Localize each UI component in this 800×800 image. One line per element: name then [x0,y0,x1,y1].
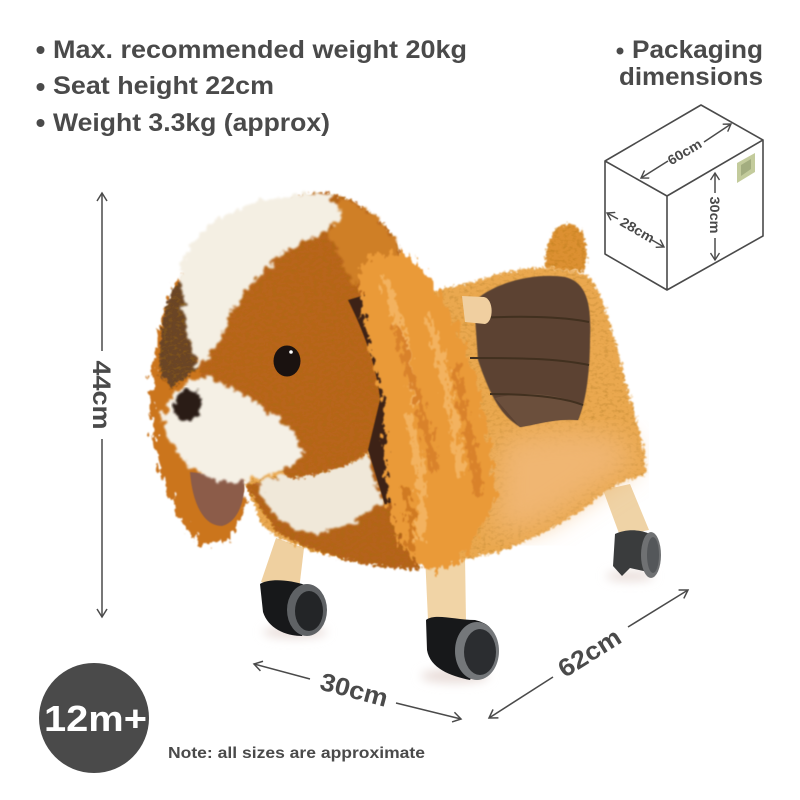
lighter body fur [495,431,635,535]
heading: packaging dimensions [616,36,763,91]
ear shadow [348,295,400,505]
seat cushion [470,276,590,427]
text block: product specifications [36,36,467,137]
dimension: 60cm box length: 60cm [665,136,704,168]
illustration: plush dog ride-on toy [151,193,661,683]
rear leg and wheel [603,484,661,578]
spec: weight: Weight 3.3kg (approx) [53,109,330,137]
front left leg and wheel [260,538,327,636]
nose [174,390,202,420]
lower belly [245,450,420,570]
tongue [190,472,244,526]
chest patch [258,455,382,534]
upper head tone [328,198,400,285]
eye [274,346,300,376]
muzzle [163,378,305,482]
body [240,268,647,563]
spec: max recommended weight: Max. recommended weight 20kg [53,36,467,64]
note: approximate sizes: Note: all sizes are approximate [168,745,425,762]
heading: packaging dimensions: Packaging [632,36,763,64]
forehead white stripe [181,193,341,369]
dimension: 30cm width arrow [254,664,461,719]
dimension: 28cm box depth: 28cm [617,214,657,246]
dimension: 30cm box height [707,173,722,260]
dimension: 30cm width arrow: 30cm [317,668,391,713]
head [197,193,403,478]
wheel shadows [263,571,654,683]
near ear [358,252,496,569]
heading: packaging dimensions: dimensions [619,63,763,91]
wooden handle [462,296,492,324]
far ear [151,272,245,547]
dimension: 62cm length arrow: 62cm [553,623,626,683]
dimension: 60cm box length [641,124,731,178]
front centre leg and wheel [425,555,499,680]
badge: age 12m+: 12m+ [44,698,147,739]
dimension: 62cm length arrow [489,590,688,718]
dimension: 30cm box height: 30cm [707,196,722,234]
dimension: 44cm height arrow: 44cm [87,360,115,430]
tail [545,224,586,272]
dimension: 28cm box depth [607,213,664,247]
icon: packaging box with dimensions [605,105,763,290]
badge: age 12m+ [39,663,149,773]
spec: seat height: Seat height 22cm [53,72,274,100]
sticker on box [737,153,755,183]
